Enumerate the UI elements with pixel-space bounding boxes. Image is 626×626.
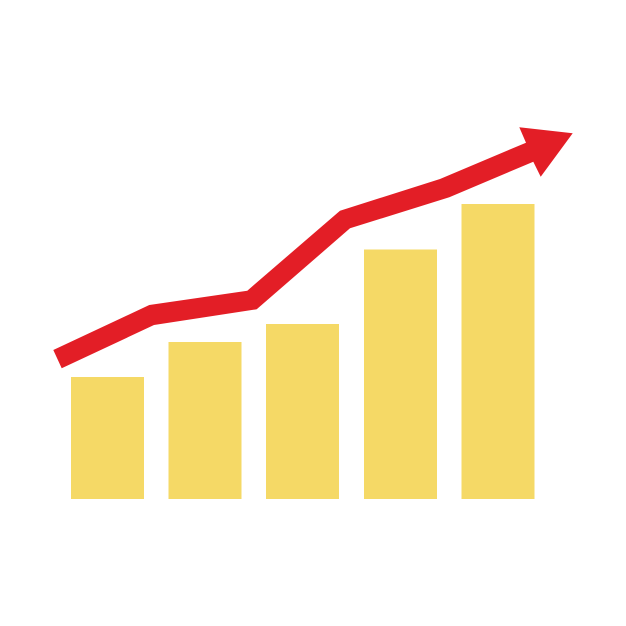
bar chart [71,204,534,499]
bar 4 [364,250,437,499]
arrow: rising red trend line [53,127,573,368]
bar 3 [266,324,339,499]
bar 1 [71,377,144,499]
bar 5 [462,204,534,499]
bar 2 [168,342,242,499]
